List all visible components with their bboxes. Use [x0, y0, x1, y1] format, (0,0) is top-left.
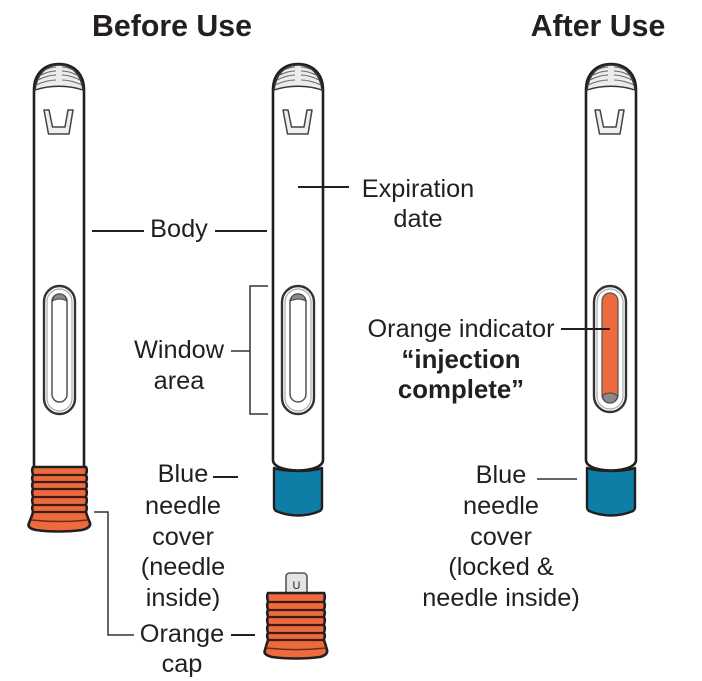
cap body	[265, 593, 327, 658]
blue needle cover	[274, 468, 322, 516]
label: window area with bracket: area	[154, 367, 205, 395]
pen: before use with blue needle cover	[273, 64, 323, 516]
label: blue needle cover after use: needle	[463, 492, 539, 520]
label: blue needle cover before use: Blue	[158, 460, 208, 488]
pen ribbed top	[274, 65, 322, 90]
pen body	[273, 64, 323, 470]
label: blue needle cover before use	[141, 460, 238, 612]
pen: before use with orange cap	[28, 64, 90, 532]
label: orange indicator injection complete	[367, 315, 610, 404]
pen ribbed top	[35, 65, 83, 90]
inspection window	[282, 286, 314, 414]
inspection window	[44, 286, 75, 414]
label: blue needle cover after use: cover	[470, 523, 532, 551]
label: blue needle cover after use: Blue	[476, 461, 526, 489]
pen clip mark	[44, 110, 73, 134]
label: orange cap with elbow leader	[94, 512, 255, 678]
pen: after use with orange indicator	[586, 64, 636, 516]
label: blue needle cover after use	[422, 461, 580, 612]
pen body	[34, 64, 84, 467]
label: blue needle cover before use: cover	[152, 523, 214, 551]
label: orange cap with elbow leader: Orange	[140, 620, 224, 648]
label: blue needle cover before use: needle	[145, 492, 221, 520]
label: orange indicator injection complete: “injection	[402, 346, 520, 374]
label: orange indicator injection complete: complete”	[398, 376, 524, 404]
orange cap	[28, 467, 90, 532]
blue needle cover	[587, 468, 635, 516]
label: blue needle cover before use: inside)	[146, 584, 220, 612]
heading: after use: After Use	[531, 10, 665, 43]
pen clip mark	[595, 110, 624, 134]
detached orange cap with needle shield	[265, 573, 327, 658]
label: body with leader lines: Body	[150, 215, 208, 243]
label: blue needle cover after use: needle inside)	[422, 584, 580, 612]
window with orange indicator	[594, 286, 626, 412]
label: blue needle cover after use: (locked &	[448, 553, 554, 581]
label: window area with bracket: Window	[134, 336, 225, 364]
label: orange indicator injection complete: Orange indicator	[367, 315, 555, 343]
pen body	[586, 64, 636, 470]
label: expiration date	[298, 175, 474, 233]
label: expiration date: date	[393, 205, 443, 233]
pen ribbed top	[587, 65, 635, 90]
label: expiration date: Expiration	[362, 175, 474, 203]
label: window area with bracket	[134, 286, 268, 414]
pen clip mark	[283, 110, 312, 134]
heading: before use: Before Use	[92, 10, 252, 43]
label: blue needle cover before use: (needle	[141, 553, 225, 581]
needle shield: U	[293, 580, 301, 592]
label: orange cap with elbow leader: cap	[162, 650, 202, 678]
